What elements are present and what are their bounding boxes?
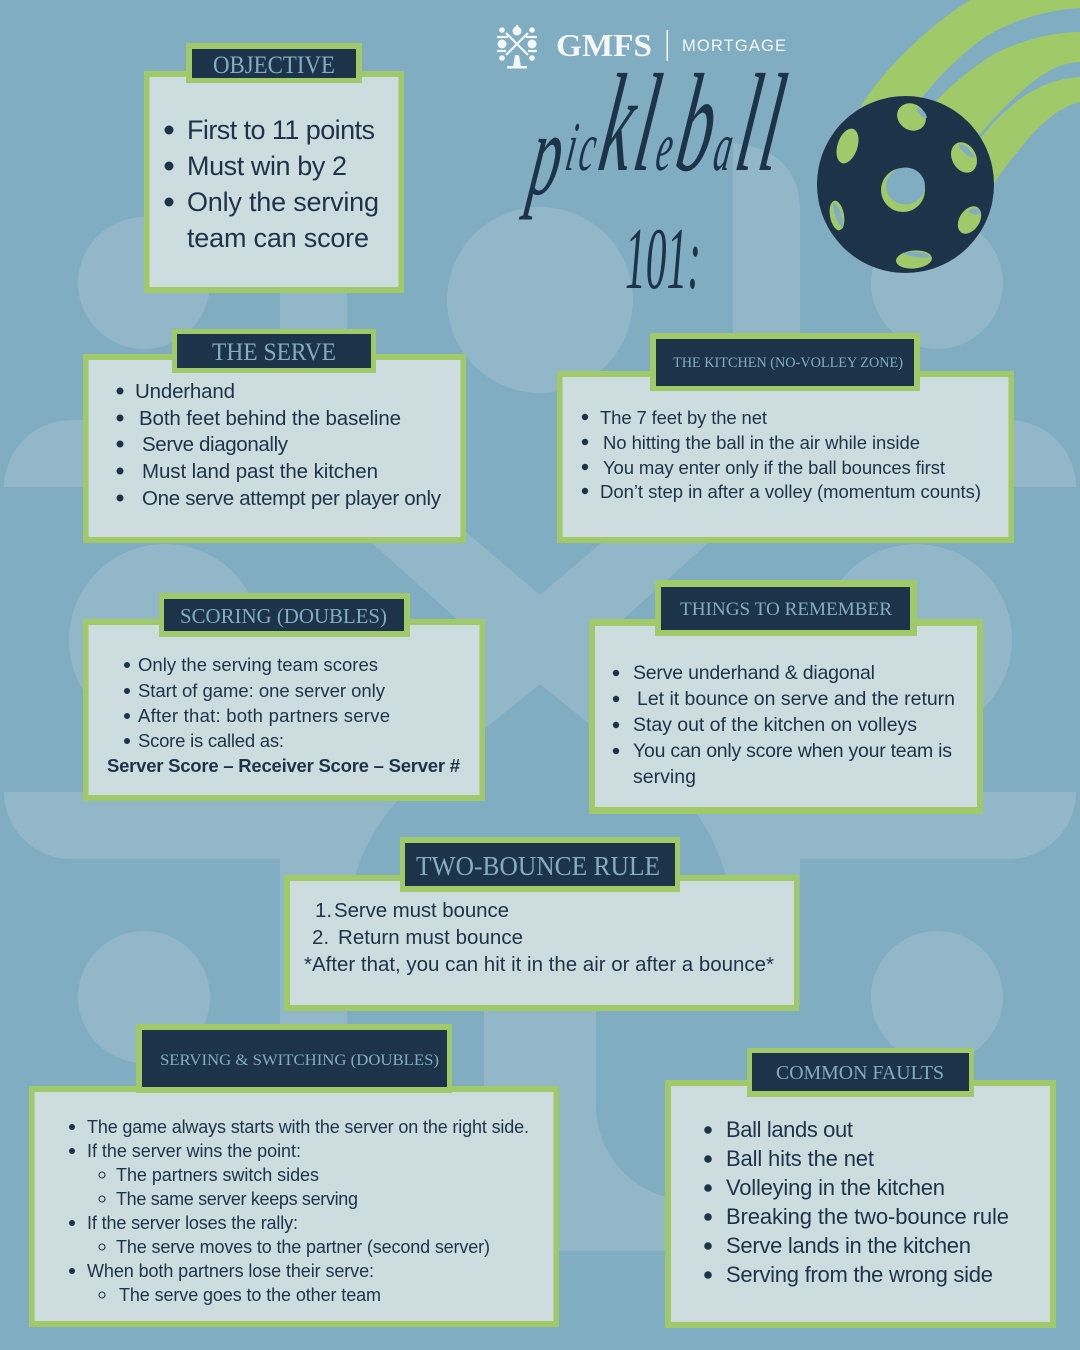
list: two-bounce rule: *After that, you can hit it in the air or after a bounce*: [304, 953, 774, 976]
list: serving and switching: The game always starts with the server on the right side.: [87, 1117, 529, 1137]
heading: common faults: [747, 1048, 974, 1097]
heading: two-bounce rule: TWO-BOUNCE RULE: [416, 851, 660, 881]
panel: objective: [144, 43, 404, 293]
list: objective: [164, 115, 379, 253]
panel: scoring (doubles): [83, 593, 485, 801]
heading: scoring: SCORING (DOUBLES): [180, 604, 387, 628]
list: things to remember: serving: [633, 766, 696, 788]
icon: pickleball: [817, 96, 994, 273]
list: things to remember: [613, 662, 955, 788]
heading: the kitchen: THE KITCHEN (NO-VOLLEY ZONE): [673, 355, 903, 371]
list: two-bounce rule: Return must bounce: [338, 926, 523, 949]
wordmark: mortgage: MORTGAGE: [682, 37, 786, 55]
list: two-bounce rule: 2.: [312, 926, 329, 949]
panel: two-bounce rule: [284, 837, 799, 1011]
panel: the serve: [83, 329, 466, 543]
list: objective: Must win by 2: [187, 151, 347, 181]
list: things to remember: Serve underhand & diagonal: [633, 662, 875, 684]
panel: common faults: [665, 1048, 1056, 1328]
wordmark: GMFS: GMFS: [556, 27, 652, 63]
icon: GMFS tree: [497, 25, 537, 68]
panel: things to remember: [589, 580, 983, 814]
heading: the serve: [172, 329, 376, 373]
panel: the kitchen: [557, 333, 1014, 543]
heading: objective: OBJECTIVE: [213, 52, 335, 79]
list: things to remember: Let it bounce on serve and the return: [637, 688, 955, 710]
heading: the serve: THE SERVE: [212, 339, 336, 366]
list: common faults: Serving from the wrong side: [726, 1262, 993, 1287]
list: objective: First to 11 points: [187, 115, 375, 145]
list: common faults: Serve lands in the kitchen: [726, 1233, 971, 1258]
list: things to remember: Stay out of the kitchen on volleys: [633, 714, 917, 736]
list: the serve: One serve attempt per player only: [142, 487, 442, 510]
title: kleball: [591, 46, 795, 201]
list: scoring: Score is called as:: [138, 730, 284, 751]
list: the kitchen: You may enter only if the ball bounces first: [603, 457, 945, 478]
list: the serve: [116, 380, 442, 510]
list: the serve: Serve diagonally: [142, 433, 289, 456]
list: common faults: Ball lands out: [726, 1117, 853, 1142]
title: ic: [561, 109, 602, 186]
heading: common faults: COMMON FAULTS: [776, 1062, 944, 1084]
list: scoring: Only the serving team scores: [138, 654, 378, 675]
heading: serving and switching: SERVING & SWITCHING (DOUBLES): [160, 1052, 439, 1069]
list: common faults: Volleying in the kitchen: [726, 1175, 945, 1200]
list: serving and switching: The serve goes to the other team: [119, 1285, 381, 1305]
list: common faults: Ball hits the net: [726, 1146, 874, 1171]
list: scoring: Start of game: one server only: [138, 680, 386, 701]
list: serving and switching: [69, 1117, 529, 1305]
list: common faults: Breaking the two-bounce rule: [726, 1204, 1009, 1229]
heading: the kitchen: [650, 333, 920, 391]
list: serving and switching: If the server wins the point:: [87, 1141, 301, 1161]
heading: things to remember: THINGS TO REMEMBER: [680, 599, 892, 620]
heading: serving and switching: [136, 1024, 452, 1093]
title: 101:: [625, 211, 701, 308]
heading: two-bounce rule: [400, 837, 680, 892]
list: the kitchen: The 7 feet by the net: [600, 407, 767, 428]
swoosh trails: [850, 0, 1080, 200]
title: p: [518, 88, 573, 220]
background arch cut-outs: [354, 739, 800, 1200]
list: two-bounce rule: 1.: [315, 899, 332, 922]
list: scoring: After that: both partners serve: [138, 705, 390, 726]
list: two-bounce rule: [304, 899, 774, 976]
list: the serve: Underhand: [135, 380, 235, 403]
list: the serve: Must land past the kitchen: [142, 460, 378, 483]
list: scoring: Server Score – Receiver Score – Server #: [107, 755, 460, 776]
heading: things to remember: [655, 580, 917, 636]
list: objective: team can score: [187, 223, 369, 253]
list: two-bounce rule: Serve must bounce: [334, 899, 509, 922]
list: serving and switching: The partners switch sides: [116, 1165, 319, 1185]
list: scoring: [107, 654, 460, 776]
list: things to remember: You can only score when your team is: [633, 740, 952, 762]
list: the kitchen: Don’t step in after a volley (momentum counts): [600, 481, 981, 502]
list: serving and switching: The serve moves to the partner (second server): [116, 1237, 490, 1257]
heading: objective: [186, 43, 362, 83]
list: the serve: Both feet behind the baseline: [139, 407, 401, 430]
list: objective: Only the serving: [187, 187, 379, 217]
list: serving and switching: When both partners lose their serve:: [87, 1261, 374, 1281]
heading: scoring: [159, 593, 410, 637]
title: [518, 46, 795, 308]
panel: serving and switching: [29, 1024, 559, 1327]
list: the kitchen: No hitting the ball in the air while inside: [603, 432, 920, 453]
logo: [497, 25, 786, 68]
list: common faults: [704, 1117, 1009, 1287]
list: the kitchen: [582, 407, 981, 502]
list: serving and switching: If the server loses the rally:: [87, 1213, 298, 1233]
list: serving and switching: The same server keeps serving: [116, 1189, 358, 1209]
